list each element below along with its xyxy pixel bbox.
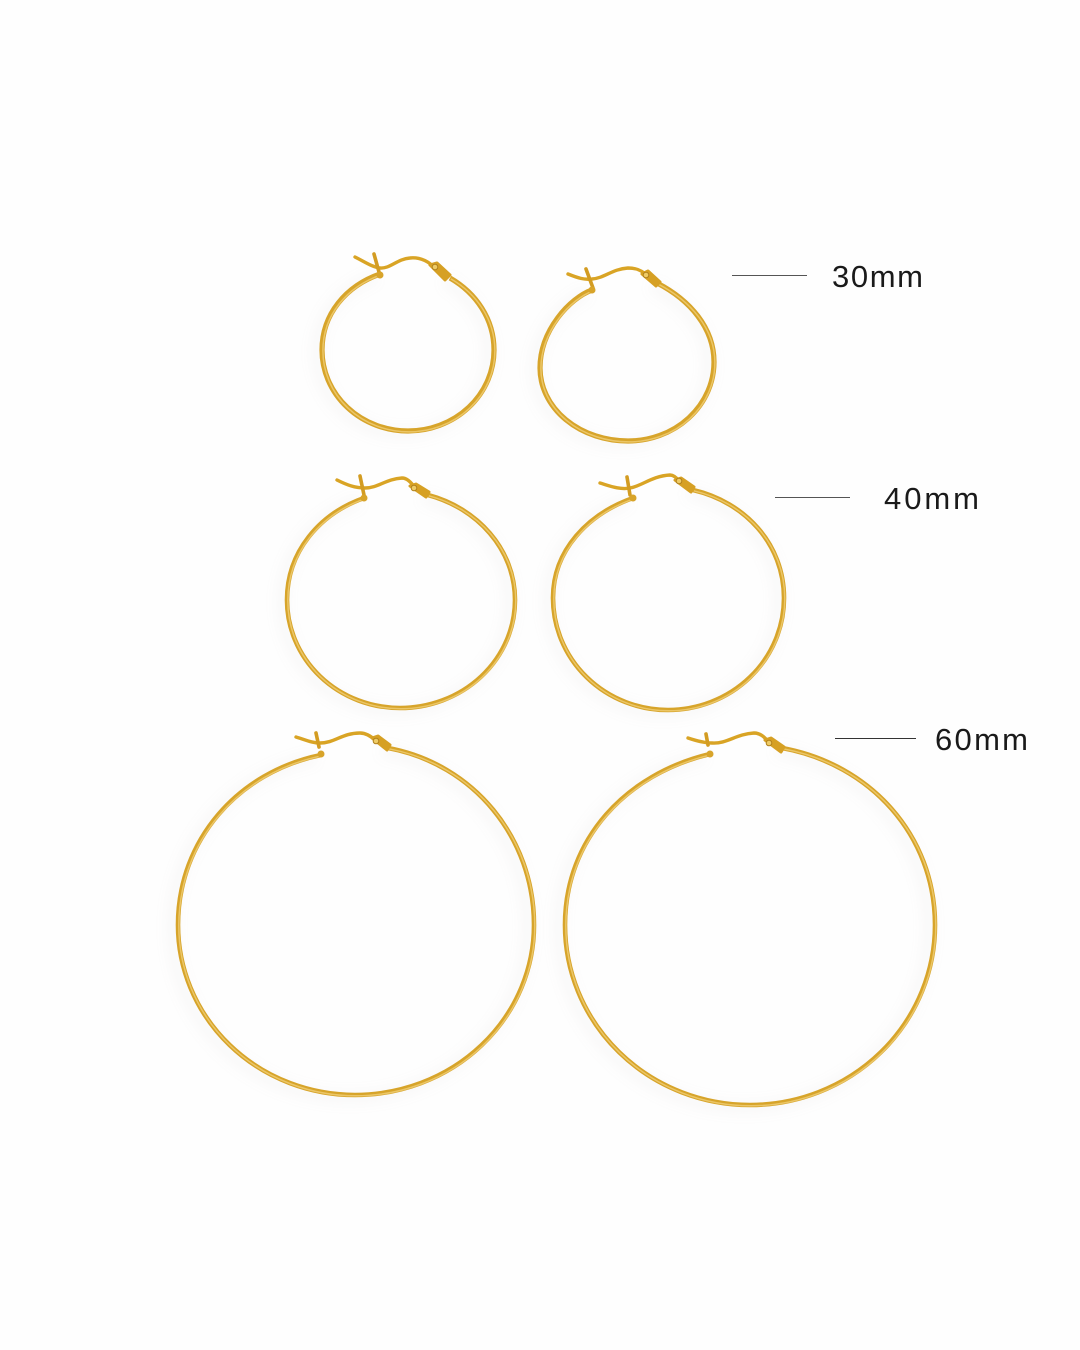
label: 60mm: 60mm xyxy=(935,722,1028,757)
label: 30mm: 30mm xyxy=(832,259,923,294)
earring: 30mm left xyxy=(317,254,495,434)
earring: 60mm left xyxy=(172,733,535,1098)
earring: 40mm right xyxy=(548,475,785,713)
label: 40mm: 40mm xyxy=(884,481,979,516)
earring: 40mm left xyxy=(282,476,516,711)
earring: 30mm right xyxy=(535,268,715,444)
earring: 60mm right xyxy=(559,733,936,1108)
